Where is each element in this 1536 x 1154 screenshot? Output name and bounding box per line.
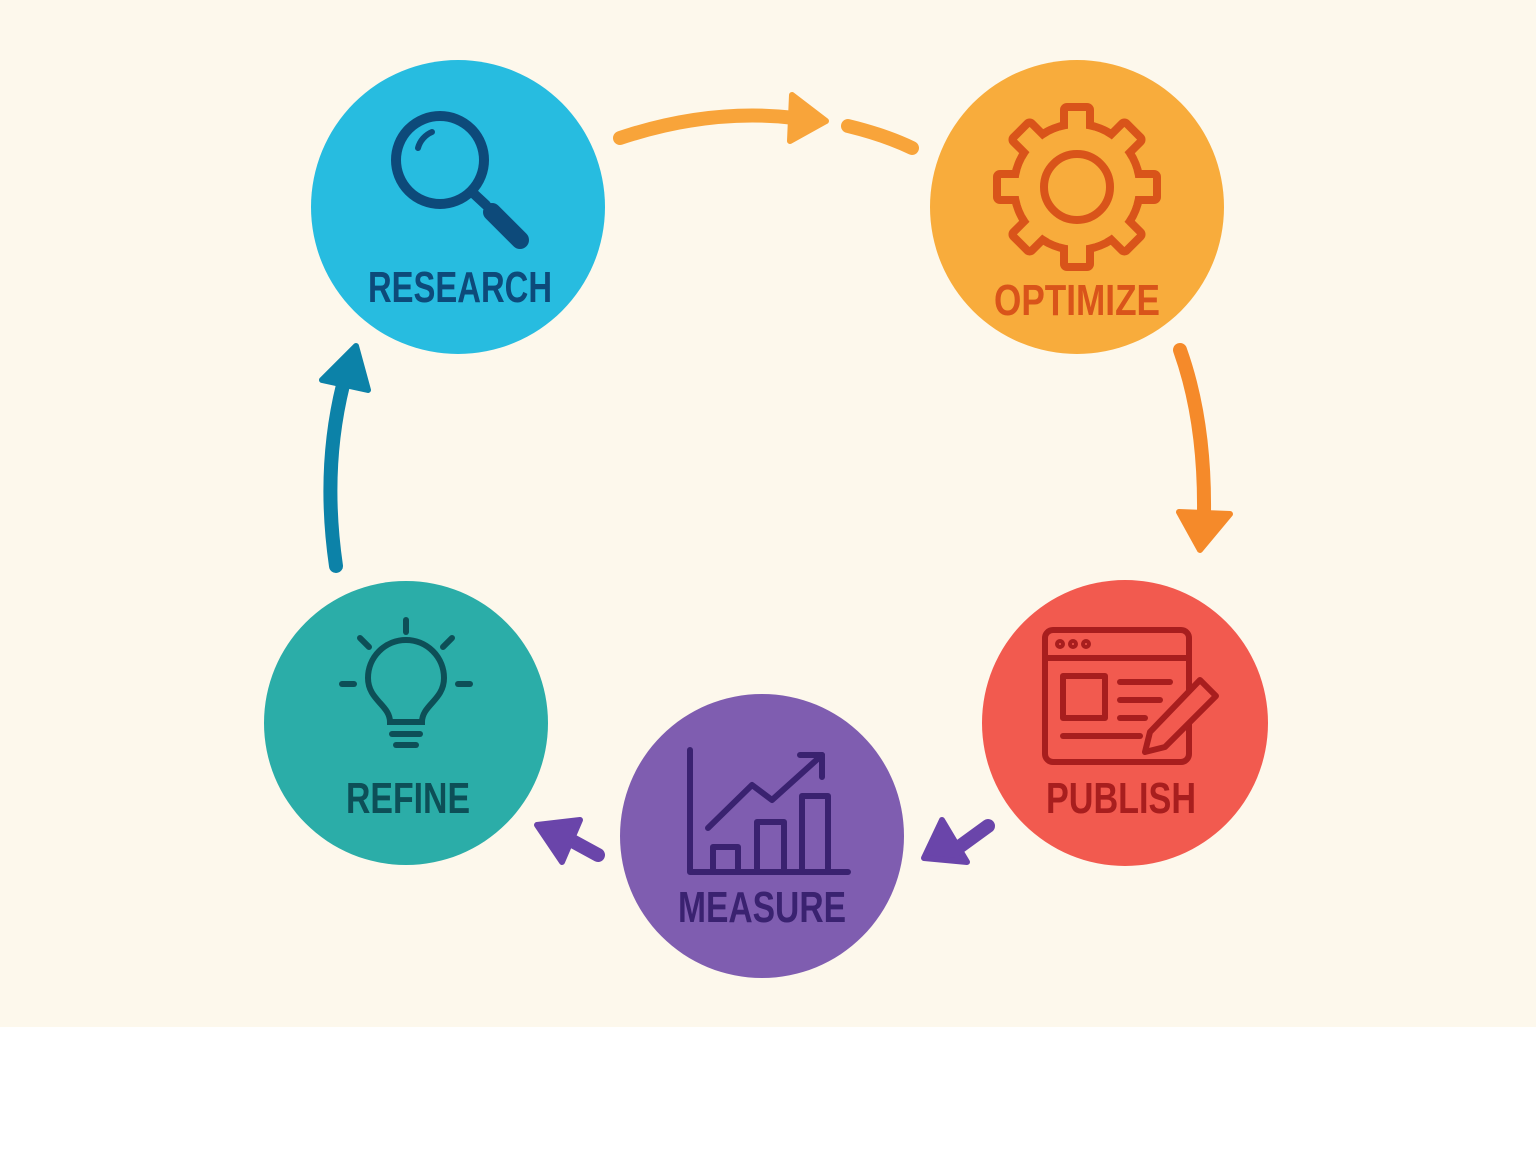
circle: refine bbox=[264, 581, 548, 865]
icon: bar chart bbox=[690, 750, 848, 872]
icon: magnifier bbox=[396, 116, 520, 240]
circle: optimize bbox=[930, 60, 1224, 354]
label: refine: REFINE bbox=[346, 774, 470, 823]
icon: browser with pencil bbox=[1045, 630, 1216, 762]
circle: research bbox=[311, 60, 605, 354]
label: measure: MEASURE bbox=[678, 883, 846, 932]
arrow: optimize to publish bbox=[1179, 350, 1230, 550]
arrow: measure to refine bbox=[537, 820, 598, 862]
arrow: refine to research bbox=[322, 346, 368, 566]
arrow: publish to measure bbox=[924, 820, 988, 862]
icon: gear bbox=[997, 107, 1157, 267]
icon: lightbulb bbox=[342, 620, 470, 745]
circle: publish bbox=[982, 580, 1268, 866]
circle: measure bbox=[620, 694, 904, 978]
label: optimize: OPTIMIZE bbox=[994, 276, 1160, 325]
label: publish: PUBLISH bbox=[1046, 774, 1196, 823]
label: research: RESEARCH bbox=[368, 263, 552, 312]
arrow: research to optimize bbox=[620, 95, 912, 148]
